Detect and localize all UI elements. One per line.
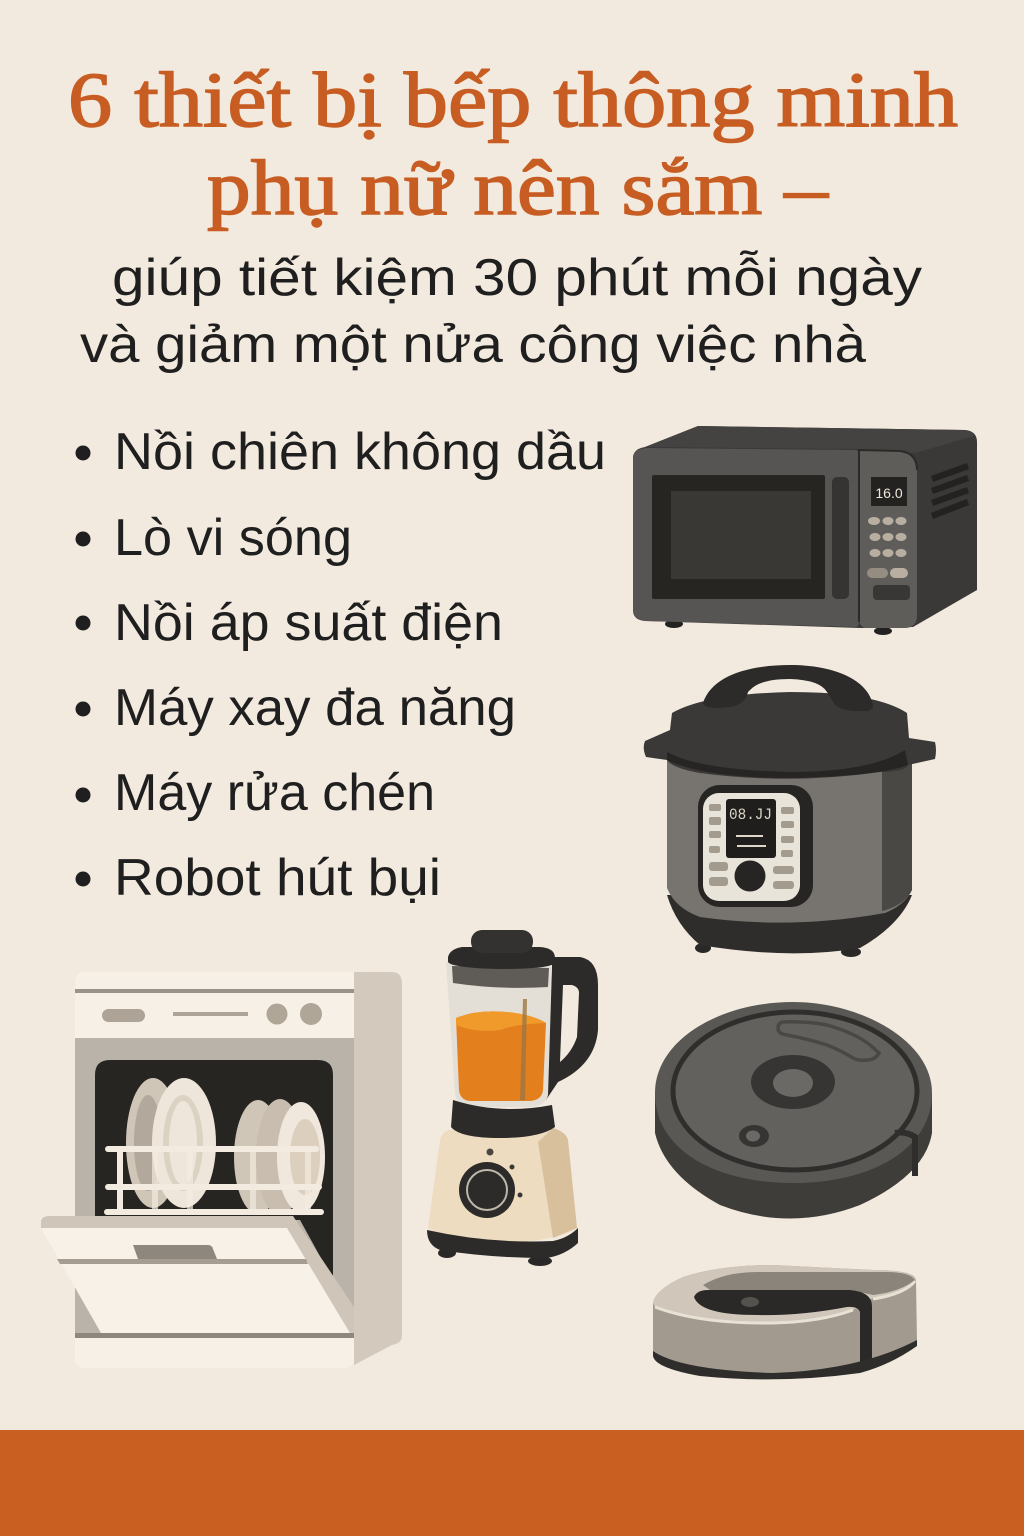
icon: dishwasher [41,972,402,1368]
plates [126,1078,325,1215]
title: 6 thiết bị bếp thông minh [68,56,958,143]
device list: Máy xay đa năng [114,679,516,737]
device list: Robot hút bụi [114,849,441,907]
subtitle: và giảm một nửa công việc nhà [80,316,866,374]
bottom band [0,1430,1024,1536]
subtitle: giúp tiết kiệm 30 phút mỗi ngày [112,249,922,307]
title: phụ nữ nên sắm – [207,144,829,231]
icon: robot vacuum side view [653,1265,917,1379]
icon: robot vacuum top view [655,1002,932,1218]
icon: blender [427,930,598,1266]
dish rack [104,1146,324,1215]
icon: pressure cooker: 08.JJ [729,806,772,824]
device list [76,423,606,907]
subtitle [80,249,922,374]
device list: Nồi chiên không dầu [114,423,606,481]
device list: Máy rửa chén [114,764,435,822]
device list: Nồi áp suất điện [114,594,503,652]
device list: Lò vi sóng [114,509,352,567]
icon: microwave [633,426,977,635]
icon: pressure cooker [644,665,936,957]
icon: microwave: 16.0 [875,485,903,501]
title [68,56,958,231]
